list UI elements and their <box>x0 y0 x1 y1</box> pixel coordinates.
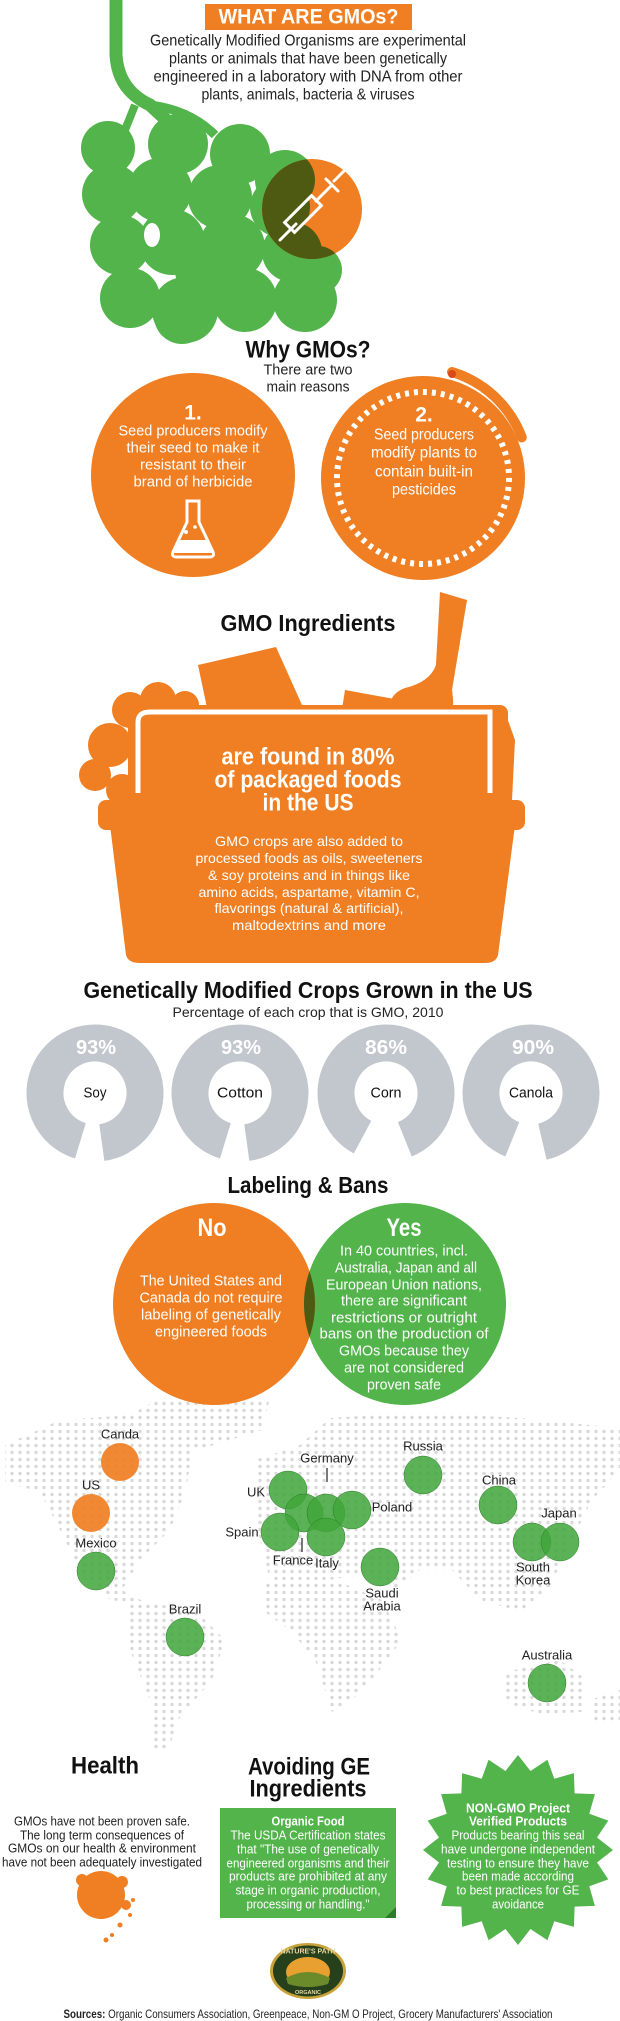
venn: yes text: are not considered <box>344 1360 464 1376</box>
basket illustration <box>79 592 525 963</box>
health text <box>2 1814 202 1870</box>
map labels: Korea <box>516 1572 551 1588</box>
basket illustration: in the US <box>262 790 354 816</box>
reason 1 circle: their seed to make it <box>126 440 260 456</box>
reason 2 circle: contain built-in <box>375 464 473 480</box>
panel: organic food: processing or handling." <box>246 1896 370 1912</box>
map labels: Japan <box>541 1506 577 1520</box>
donut chart: soy: Soy <box>84 1084 107 1102</box>
basket illustration: are found in 80% <box>222 744 394 770</box>
panel: organic food <box>220 1808 396 1918</box>
title: WHAT ARE GMOs? <box>218 6 398 28</box>
reason 1 circle: Seed producers modify <box>118 422 268 440</box>
donut chart: cotton: 93% <box>221 1037 261 1059</box>
basket illustration: maltodextrins and more <box>232 917 386 933</box>
map labels: France <box>273 1552 313 1568</box>
map labels: UK <box>247 1484 265 1500</box>
venn: yes text: proven safe <box>367 1376 441 1394</box>
donut chart: corn: Corn <box>370 1084 402 1102</box>
venn: no text: No <box>198 1214 226 1242</box>
icon: orange splat <box>76 1871 135 1942</box>
map labels: Italy <box>315 1556 339 1570</box>
basket illustration: & soy proteins and in things like <box>208 867 410 883</box>
venn: yes text: there are significant <box>341 1292 468 1310</box>
panel: organic food: that "The use of genetically <box>237 1842 379 1856</box>
donut chart: soy <box>33 1031 157 1155</box>
health text: GMOs on our health & environment <box>8 1840 196 1856</box>
donut chart: canola <box>466 1028 596 1158</box>
venn: yes text: In 40 countries, incl. <box>340 1242 468 1260</box>
donut chart: cotton: Cotton <box>217 1084 263 1102</box>
heading: why GMOs <box>246 336 370 396</box>
intro text: engineered in a laboratory with DNA from other <box>154 68 463 86</box>
heading: avoiding GE ingredients: Ingredients <box>250 1776 366 1802</box>
panel: non-GMO seal: avoidance <box>492 1896 544 1912</box>
intro text: plants or animals that have been genetically <box>169 50 447 68</box>
map labels: Australia <box>522 1648 573 1662</box>
basket illustration: GMO crops are also added to <box>215 833 403 849</box>
venn: no text: The United States and <box>140 1272 282 1290</box>
world map dots <box>5 1398 620 1752</box>
map labels: Brazil <box>169 1602 201 1616</box>
venn: yes text: restrictions or outright <box>331 1310 478 1326</box>
heading: GM crops <box>84 977 532 1020</box>
map labels: Mexico <box>75 1536 117 1550</box>
basket illustration: amino acids, aspartame, vitamin C, <box>198 884 420 900</box>
panel: organic food: The USDA Certification states <box>230 1828 386 1842</box>
health text: have not been adequately investigated <box>2 1854 202 1870</box>
health text: The long term consequences of <box>20 1828 184 1842</box>
donut chart: corn: 86% <box>365 1037 407 1059</box>
donut chart: canola: 90% <box>512 1037 554 1059</box>
panel: organic food: Organic Food <box>272 1814 345 1828</box>
panel: non-GMO seal: Products bearing this seal <box>452 1828 585 1842</box>
panel: non-GMO seal: Verified Products <box>469 1814 567 1828</box>
reason 2 circle: 2. <box>415 404 433 426</box>
heading: why GMOs: Why GMOs? <box>246 336 370 364</box>
map markers <box>72 1426 579 1702</box>
donut chart: soy: 93% <box>76 1037 116 1059</box>
venn: yes text: GMOs because they <box>339 1342 469 1360</box>
panel: non-GMO seal: been made according <box>462 1868 574 1884</box>
icon: syringe circle <box>262 159 362 259</box>
venn: no text <box>140 1214 282 1340</box>
logo: nature's path <box>270 1943 346 1999</box>
panel: non-GMO seal: to best practices for GE <box>456 1882 580 1898</box>
venn: no text: Canada do not require <box>140 1290 282 1306</box>
venn: yes text: bans on the production of <box>320 1326 489 1342</box>
intro text <box>150 32 466 104</box>
panel: non-GMO seal: have undergone independent <box>441 1842 595 1856</box>
panel: organic food: stage in organic production, <box>236 1882 380 1898</box>
reason 2 circle: pesticides <box>392 482 456 498</box>
reason 1 circle: brand of herbicide <box>134 474 252 490</box>
venn: no text: engineered foods <box>155 1324 267 1340</box>
map labels <box>75 1426 577 1662</box>
map labels: Germany <box>300 1450 354 1466</box>
venn: yes text: Yes <box>386 1214 422 1242</box>
panel: organic food: products are prohibited at any <box>229 1868 387 1884</box>
basket illustration: flavorings (natural & artificial), <box>214 900 404 916</box>
heading: avoiding GE ingredients <box>248 1754 370 1802</box>
intro text: plants, animals, bacteria & viruses <box>202 86 414 104</box>
logo: nature's path: ORGANIC <box>295 1990 321 1996</box>
grapes illustration <box>81 0 362 344</box>
heading: GMO ingredients: GMO Ingredients <box>220 610 396 636</box>
health text: GMOs have not been proven safe. <box>14 1814 190 1828</box>
donut chart: canola: Canola <box>509 1084 554 1102</box>
donut chart: corn <box>318 1025 454 1161</box>
logo: nature's path: NATURE'S PATH <box>281 1948 335 1956</box>
venn: yes text: Australia, Japan and all <box>335 1260 477 1276</box>
heading: why GMOs: There are two <box>264 362 352 378</box>
reason 1 circle: 1. <box>184 402 202 424</box>
map labels: Saudi <box>365 1586 399 1600</box>
heading: health: Health <box>71 1752 139 1780</box>
donut chart: cotton <box>178 1031 302 1155</box>
map labels: Poland <box>372 1500 412 1514</box>
venn: yes text: European Union nations, <box>326 1276 482 1294</box>
icon: flask <box>172 501 214 557</box>
map labels: South <box>516 1560 550 1574</box>
heading: GM crops: Genetically Modified Crops Grown in the US <box>84 977 532 1003</box>
heading: labeling & bans: Labeling & Bans <box>228 1172 388 1198</box>
heading: GM crops: Percentage of each crop that is GMO, 2010 <box>172 1004 444 1020</box>
venn: yes text <box>320 1214 489 1394</box>
map labels: Arabia <box>363 1598 402 1614</box>
reason 2 circle: Seed producers <box>374 426 474 444</box>
icon: caterpillar <box>448 370 522 438</box>
map labels: Spain <box>225 1524 259 1540</box>
intro text: Genetically Modified Organisms are experimental <box>150 32 466 50</box>
map labels: China <box>482 1472 517 1488</box>
reason 1 circle: resistant to their <box>140 456 246 474</box>
basket illustration: processed foods as oils, sweeteners <box>196 850 422 866</box>
venn: no text: labeling of genetically <box>141 1306 281 1324</box>
map labels: Russia <box>403 1438 444 1454</box>
basket illustration: of packaged foods <box>214 766 402 794</box>
map labels: US <box>82 1478 100 1492</box>
reason 1 circle <box>91 373 295 577</box>
panel: non-GMO seal: NON-GMO Project <box>466 1800 571 1816</box>
reason 2 circle <box>321 370 525 580</box>
panel: non-GMO seal: testing to ensure they have <box>447 1856 589 1870</box>
reason 2 circle: modify plants to <box>371 444 477 462</box>
heading: avoiding GE ingredients: Avoiding GE <box>248 1754 370 1780</box>
map labels: Canda <box>101 1426 140 1442</box>
venn: no / yes <box>113 1203 506 1405</box>
panel: non-GMO seal <box>423 1755 613 1945</box>
heading: why GMOs: main reasons <box>266 378 350 396</box>
panel: organic food: engineered organisms and their <box>226 1856 390 1870</box>
